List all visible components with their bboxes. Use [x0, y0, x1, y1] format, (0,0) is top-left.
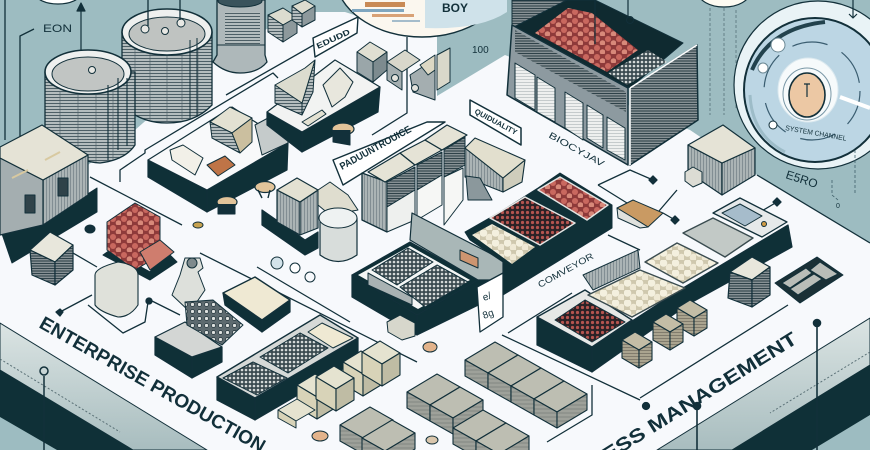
sign: production: PADUUNTROUICE: [338, 124, 414, 173]
label: ERO: 0: [836, 203, 840, 210]
sign: production: [333, 122, 445, 185]
left building: [0, 125, 97, 263]
small building: right: [685, 125, 755, 195]
lenses: [271, 257, 315, 282]
tray cluster: three cells: [217, 315, 358, 420]
tablet panel: [713, 198, 787, 237]
tray group: meat and white: [465, 173, 612, 295]
box on platform: [210, 107, 252, 133]
packets: [170, 145, 203, 175]
gauge dial: [734, 1, 870, 169]
orange book: [207, 156, 235, 176]
band: right floor edge: [657, 175, 870, 450]
small bubble: top left: [36, 0, 80, 4]
wall: front: [507, 25, 628, 165]
tray b: [223, 277, 290, 332]
ingots: right: [775, 257, 843, 303]
arrow: up from tank: [77, 3, 85, 52]
pile: gravel: [608, 50, 667, 85]
boxes: cream stack: [278, 341, 400, 428]
gauge caption: SYSTEM CHANNEL: [785, 125, 847, 143]
top bubble: [335, 0, 509, 37]
band: left floor edge: [0, 323, 207, 450]
gray panel: [410, 213, 503, 280]
glass drum: [319, 208, 357, 262]
sign: quality: QUIDUALITY: [473, 107, 519, 137]
label: EON: [20, 23, 72, 150]
pin: bottom left: [40, 367, 48, 450]
tray row: right: [537, 218, 792, 372]
panel behind trays: [583, 250, 640, 290]
pile: meat: [535, 8, 638, 72]
stools: [85, 123, 354, 233]
coin stools: lower: [312, 342, 438, 444]
label: conveyor: COMVEYOR: [536, 251, 596, 290]
note sign: [477, 273, 503, 332]
sack: [95, 262, 138, 317]
tray block: central gray: [352, 213, 503, 340]
orange parcel: [617, 200, 663, 228]
boxes: cluster upper right: [357, 42, 450, 100]
burlap boxes: [622, 300, 707, 368]
sign: quality: [470, 100, 521, 145]
platform: left: [148, 107, 288, 212]
meat stack on pallet: [103, 203, 177, 280]
box on platform: [275, 85, 302, 115]
bubble label: BOY: [442, 1, 468, 15]
wall: right: [630, 45, 698, 165]
label: ERO: [784, 150, 855, 210]
small box: [387, 315, 415, 340]
note sign: 8g: [481, 308, 495, 322]
note sign: e/: [481, 291, 493, 304]
label: ERO: E5RO: [784, 168, 819, 191]
cylinder silo: [213, 0, 267, 73]
label: EON: EON: [43, 23, 72, 35]
platform: upper: [267, 60, 380, 152]
boxes: top centre: [268, 0, 315, 42]
cart: left: [30, 232, 73, 285]
tank: back: [122, 0, 212, 123]
warehouse: [507, 0, 698, 165]
mid-left cabinets on platform: [262, 178, 358, 255]
label: warehouse floor: BIOCYJAV: [547, 130, 606, 169]
pin: bottom centre: [694, 402, 700, 450]
pin: bottom right: [814, 320, 820, 450]
crates: big row: [340, 342, 587, 450]
small bubble: top right: [698, 0, 750, 7]
sign: upper: [313, 17, 358, 57]
tank: front: [45, 50, 135, 163]
bag figure: [172, 258, 205, 312]
sign: upper: EDUDD: [315, 27, 352, 51]
shelving building: [362, 125, 525, 232]
tray a with net: [155, 300, 243, 378]
arrow: top right: [849, 0, 857, 18]
cart: right: [728, 257, 770, 307]
label: 100: 100: [472, 45, 489, 56]
crate beside shelving: [465, 148, 503, 192]
